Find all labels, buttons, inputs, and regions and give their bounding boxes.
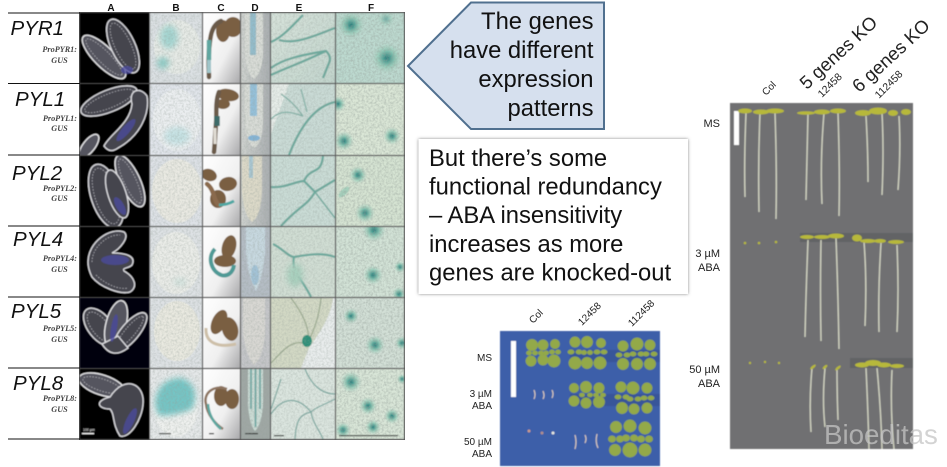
label: PYL8: GUS — [51, 405, 68, 414]
label: PYL5: GUS — [51, 335, 68, 344]
column headers A to F: E — [296, 3, 303, 14]
watermark: Bioeditas: Bioeditas — [824, 419, 938, 450]
plate column labels: 12458 — [576, 300, 604, 328]
label: PYL2: GUS — [51, 194, 68, 203]
label: Col: Col — [760, 80, 779, 98]
label: PYL8: PYL8 — [13, 372, 64, 395]
row labels: ABA — [698, 262, 721, 274]
label: PYL8: ProPYL8: — [43, 394, 77, 403]
row: PYL4 images — [80, 218, 406, 301]
row: PYL5 images — [77, 298, 409, 368]
rosettes: 112458 on 50 uM — [608, 420, 652, 457]
plate column labels: 112458 — [626, 298, 658, 329]
column headers A to F: D — [251, 3, 259, 14]
rosettes: Col on MS — [526, 340, 560, 367]
label: PYL5: ProPYL5: — [43, 324, 77, 333]
label: 6 genes KO: 6 genes KO — [848, 15, 934, 96]
plate row labels: 50 µM — [464, 437, 492, 448]
label: PYL4 — [13, 228, 77, 274]
seedlings on 3 uM ABA — [744, 234, 904, 349]
label: PYR1: ProPYR1: — [42, 45, 77, 54]
label: 112458: 112458 — [873, 68, 905, 101]
label: PYR1 — [10, 17, 77, 65]
rosettes: 112458 on 3 uM — [615, 382, 654, 414]
plate row labels: 3 µM — [470, 389, 492, 400]
seedlings on MS — [738, 108, 911, 219]
callout arrow: different expression patterns: expression — [478, 66, 594, 93]
plate row labels: ABA — [472, 449, 492, 460]
rosettes: 12458 on 3 uM — [569, 382, 606, 408]
label: PYR1: PYR1 — [10, 17, 64, 40]
label: PYR1: GUS — [51, 56, 68, 65]
panel: seedling root growth plate — [689, 12, 934, 449]
label: PYL5: PYL5 — [11, 300, 62, 323]
callout box: functional redundancy: genes are knocked-out — [429, 260, 671, 286]
label: 12458: 12458 — [816, 71, 845, 100]
label: PYL1: PYL1 — [15, 88, 65, 111]
gene name labels — [8, 13, 80, 439]
plate row labels — [464, 353, 492, 460]
panel: blue rosette plate — [464, 298, 660, 466]
label: PYL4: PYL4 — [13, 228, 63, 251]
plate image — [500, 331, 660, 466]
panel: GUS expression image grid — [76, 3, 409, 440]
row: PYL2 images — [80, 151, 404, 232]
label: PYL4: GUS — [51, 265, 68, 274]
callout box: functional redundancy: But there’s some — [429, 145, 607, 172]
row: PYL8 images with scale bars: 100 μm — [83, 428, 95, 432]
row: PYL1 images — [76, 80, 404, 161]
seedlings on 50 uM ABA — [749, 360, 904, 449]
label: PYL1 — [15, 88, 77, 133]
label: PYL5 — [11, 300, 77, 344]
callout arrow: different expression patterns: The genes — [481, 8, 594, 35]
callout box: functional redundancy — [418, 139, 688, 294]
callout box: functional redundancy: – ABA insensitivity — [429, 202, 622, 229]
label: PYL1: ProPYL1: — [43, 114, 77, 123]
plate image — [730, 103, 913, 449]
rosettes: 12458 on MS — [568, 336, 607, 369]
row labels: 50 µM — [689, 364, 720, 376]
plate column labels: Col — [527, 308, 546, 326]
label: PYL2: PYL2 — [12, 162, 63, 185]
row labels: ABA — [698, 378, 721, 390]
plate row labels: ABA — [472, 401, 492, 412]
callout box: functional redundancy: functional redundancy — [429, 174, 662, 200]
row labels: 3 µM — [695, 248, 720, 260]
label: 5 genes KO: 5 genes KO — [795, 12, 881, 93]
column headers A to F: F — [368, 3, 374, 14]
row: PYL8 images with scale bars — [76, 368, 407, 439]
callout arrow: different expression patterns: have different — [450, 37, 594, 64]
column headers A to F — [107, 3, 374, 14]
callout box: functional redundancy: increases as more — [429, 231, 623, 258]
column headers A to F: B — [172, 3, 180, 14]
label: PYL2 — [12, 162, 77, 203]
row labels: MS — [704, 118, 720, 130]
label: PYL2: ProPYL2: — [43, 184, 77, 193]
column headers A to F: A — [107, 3, 115, 14]
plate column labels — [527, 298, 658, 329]
label: PYL4: ProPYL4: — [43, 254, 77, 263]
stunted seedlings — [534, 390, 598, 449]
column headers A to F: C — [217, 3, 225, 14]
rosettes: 112458 on MS — [616, 338, 657, 370]
callout arrow: different expression patterns: patterns — [508, 95, 594, 122]
row labels — [689, 118, 721, 390]
row: PYR1 images — [76, 10, 404, 85]
label: PYL8 — [13, 372, 77, 414]
callout arrow: different expression patterns — [408, 2, 604, 129]
label: PYL1: GUS — [51, 124, 68, 133]
plate row labels: MS — [477, 353, 492, 364]
